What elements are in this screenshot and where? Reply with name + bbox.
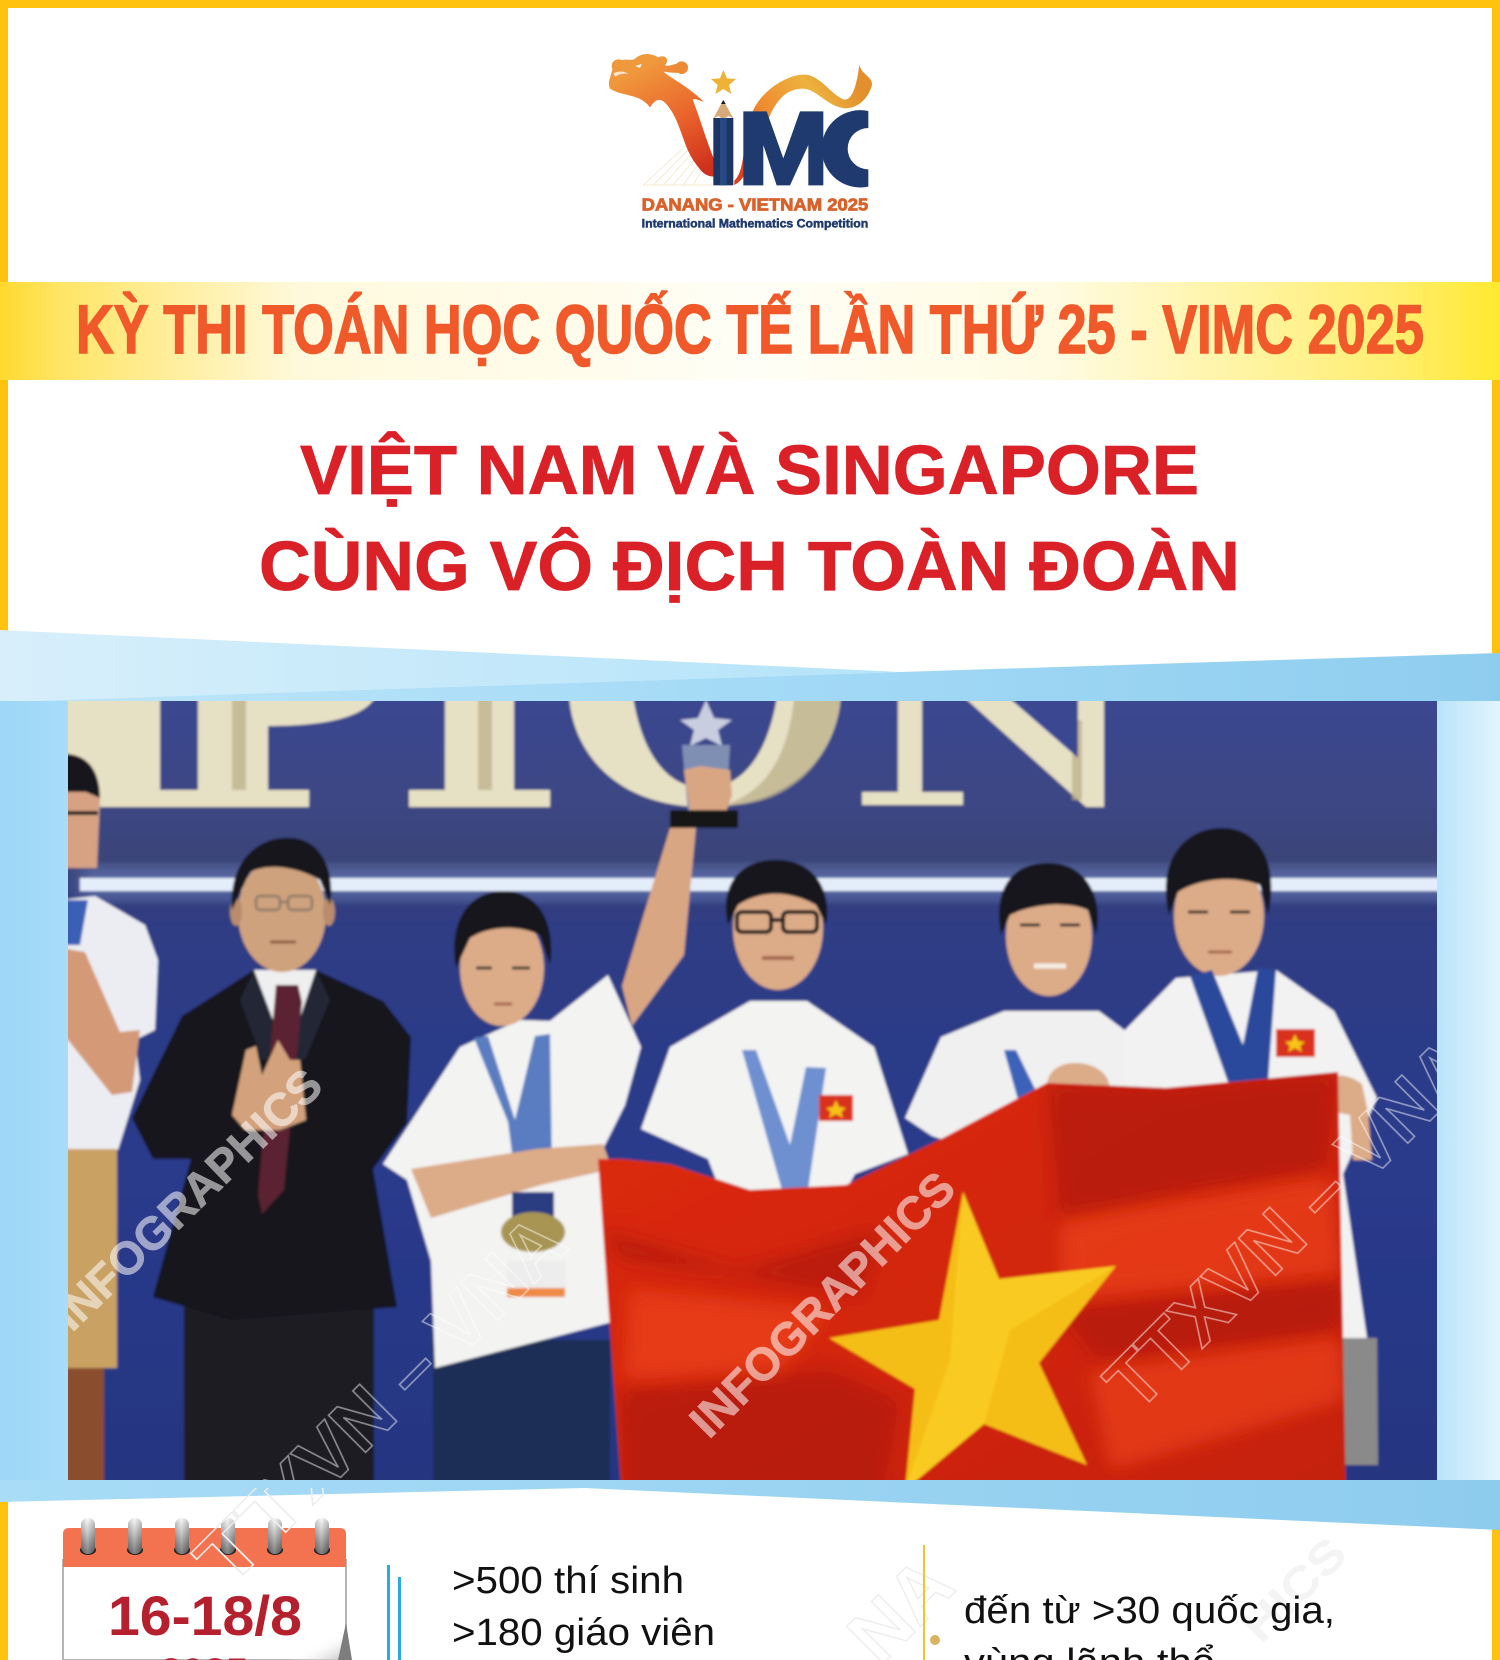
watermark: TTXVN outlines on photo: TTXVN – VNA <box>1089 1022 1493 1426</box>
watermark: faint marks on white area <box>190 1488 1344 1660</box>
Vietnamese flag <box>598 1072 1346 1500</box>
stage light bar <box>80 868 1480 898</box>
person: boy with glasses <box>641 860 908 1190</box>
photo: Vietnamese team with flag <box>68 701 1437 1480</box>
stage letter shading <box>232 690 1082 805</box>
trophy <box>670 700 738 828</box>
divider: blue lines <box>387 1565 401 1660</box>
logo dragon head and body <box>609 54 715 177</box>
watermark: faint marks on white area: TTX <box>179 1411 371 1603</box>
calendar date: 16-18/8 <box>108 1584 302 1647</box>
banner: event name <box>0 282 1500 380</box>
text block: participants: >500 thí sinh <box>452 1560 684 1602</box>
calendar header <box>63 1528 346 1567</box>
calendar curl <box>285 1623 352 1660</box>
watermark: TTXVN outlines on photo: TTXVN – VNA <box>179 1199 583 1603</box>
divider: gold line with dot <box>923 1545 940 1660</box>
flag folds <box>600 1072 1345 1500</box>
logo star <box>711 70 736 94</box>
watermark: TTXVN outlines on photo <box>262 1046 1437 1480</box>
main title: VIỆT NAM VÀ SINGAPORE <box>300 430 1199 509</box>
logo subtitle: International Mathematics Competition <box>642 216 868 230</box>
person: boy smiling <box>903 862 1126 1142</box>
person: man in suit <box>132 838 411 1510</box>
person: boy holding trophy <box>383 828 696 1510</box>
panel: left side blue <box>0 701 68 1480</box>
person: left boy <box>60 754 158 1508</box>
panel: right side blue <box>1437 701 1500 1480</box>
main title: CÙNG VÔ ĐỊCH TOÀN ĐOÀN <box>259 526 1240 605</box>
logo letter C <box>822 110 868 187</box>
logo dragon tail ribbon <box>734 65 872 185</box>
flag star <box>829 1192 1116 1490</box>
stage background <box>68 701 1437 1480</box>
stage letters CHAMPION <box>50 690 1104 807</box>
wave: bottom blue ribbon <box>0 1480 1500 1530</box>
text block: participants <box>452 1560 715 1654</box>
logo pencil <box>713 100 733 185</box>
calendar paper <box>63 1560 346 1660</box>
text block: countries <box>964 1590 1335 1660</box>
logo text: DANANG - VIETNAM 2025 <box>642 195 869 215</box>
calendar rings <box>80 1518 330 1555</box>
icon: calendar <box>63 1518 352 1660</box>
main title <box>259 430 1240 605</box>
logo rays <box>643 142 713 185</box>
watermark: infographics left: INFOGRAPHICS <box>43 1058 332 1340</box>
logo: VIMC Danang 2025 <box>609 54 872 230</box>
logo letter M <box>743 111 823 185</box>
text block: participants: >180 giáo viên <box>452 1612 715 1654</box>
stage letter N cut <box>1010 701 1080 758</box>
person: tall boy <box>1123 828 1378 1465</box>
wave: top blue ribbon <box>0 630 1500 702</box>
watermark: faint marks on white area: HICS <box>1231 1527 1356 1652</box>
text block: countries: đến từ >30 quốc gia, <box>964 1590 1335 1632</box>
watermark: infographics center: INFOGRAPHICS <box>679 1161 965 1447</box>
